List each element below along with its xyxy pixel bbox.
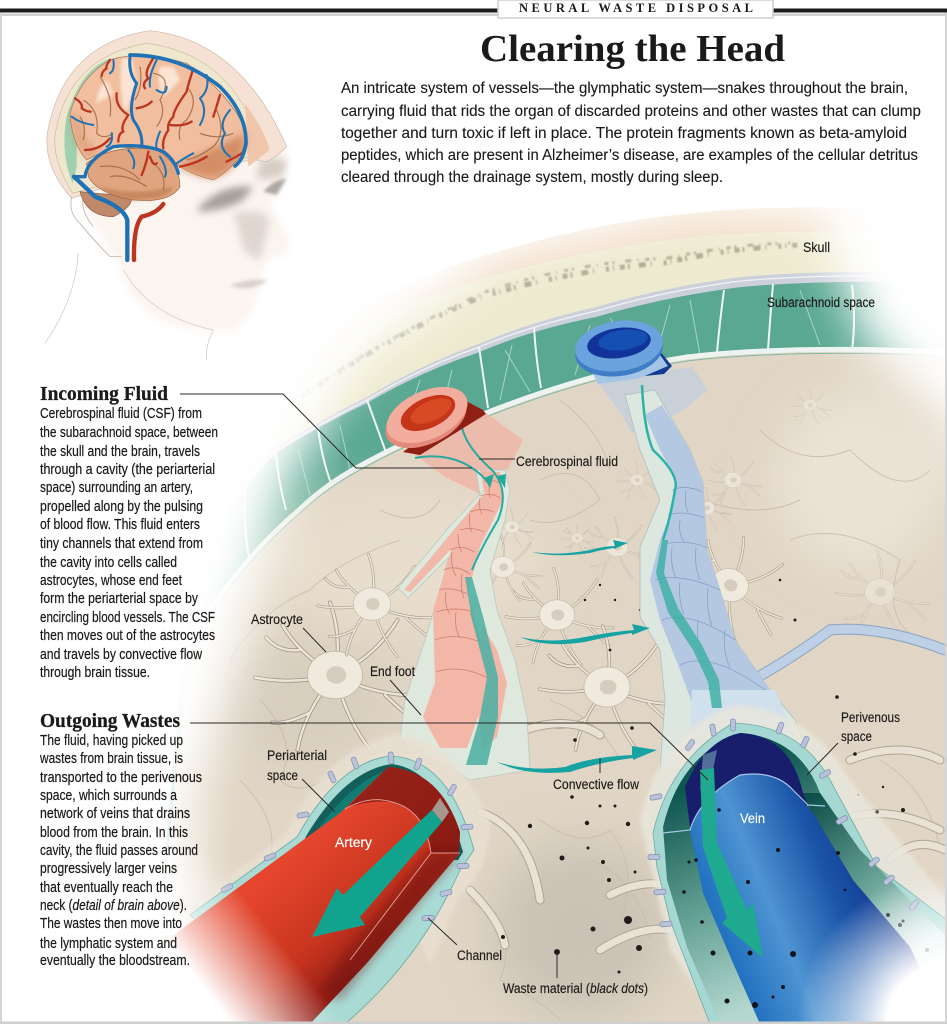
artery cross-section bbox=[150, 735, 490, 1024]
heading: incoming fluid: Incoming Fluid bbox=[40, 383, 168, 405]
text block: outgoing wastes: eventually the bloodstream. bbox=[40, 953, 190, 969]
text block: outgoing wastes: the lymphatic system and bbox=[40, 936, 177, 952]
labels: Artery bbox=[335, 835, 372, 850]
text block: incoming fluid: the cavity into cells called bbox=[40, 555, 177, 571]
ear bbox=[71, 197, 122, 257]
labels: Channel bbox=[457, 948, 502, 963]
tissue network lines bbox=[230, 400, 940, 1020]
text block: outgoing wastes: blood from the brain. In this bbox=[40, 825, 188, 841]
text block: outgoing wastes bbox=[39, 710, 202, 969]
periarterial outer wall bbox=[190, 756, 474, 1024]
astrocytes bbox=[255, 388, 929, 752]
vein cross-section bbox=[640, 705, 947, 1024]
perivenous space left bbox=[663, 733, 947, 1024]
left branch of end feet bbox=[398, 486, 490, 598]
text block: incoming fluid: encircling blood vessels. The CSF bbox=[40, 610, 215, 626]
text block: incoming fluid: and travels by convective flow bbox=[40, 647, 202, 663]
skull layers bbox=[47, 31, 287, 198]
channels on vein bbox=[648, 719, 920, 927]
navy vessel end bbox=[685, 733, 808, 828]
text block: incoming fluid: form the periarterial space by bbox=[40, 591, 199, 607]
heading: outgoing wastes: Outgoing Wastes bbox=[40, 710, 180, 732]
perivenous outer wall bbox=[653, 723, 947, 1024]
text block: incoming fluid: propelled along by the pulsing bbox=[40, 499, 203, 515]
veins bbox=[72, 55, 246, 260]
text block: incoming fluid: through brain tissue. bbox=[40, 665, 150, 681]
intro paragraph: together and turn toxic if left in place. The protein fragments known as beta-amyloid bbox=[341, 125, 907, 142]
teal flow in periarterial space bbox=[465, 577, 498, 765]
main illustration: cross section of brain surface bbox=[164, 208, 945, 1022]
small head and brain figure bbox=[45, 31, 290, 360]
text block: outgoing wastes: space, which surrounds a bbox=[40, 788, 178, 804]
arrow: CSF flow along artery bbox=[312, 810, 442, 937]
sulci bbox=[80, 67, 233, 190]
intro paragraph bbox=[341, 80, 921, 186]
text block: outgoing wastes: cavity, the fluid passes around bbox=[40, 843, 198, 859]
text block: incoming fluid: the subarachnoid space, between bbox=[40, 425, 218, 441]
waste dots bbox=[501, 579, 905, 974]
text block: outgoing wastes: transported to the perivenous bbox=[40, 770, 202, 786]
labels: Skull bbox=[803, 240, 830, 255]
text block: incoming fluid: of blood flow. This fluid enters bbox=[40, 517, 200, 533]
intro paragraph: cleared through the drainage system, mostly during sleep. bbox=[341, 169, 723, 186]
periarterial space bbox=[305, 764, 463, 860]
waste dots in vein bbox=[682, 808, 929, 1008]
temporal lobe bbox=[87, 148, 180, 201]
soft fades at lower corners bbox=[0, 850, 947, 1024]
arteries bbox=[75, 58, 242, 260]
subarachnoid cell dividers bbox=[245, 284, 854, 562]
intro paragraph: An intricate system of vessels—the glymphatic system—snakes throughout the brain, bbox=[341, 80, 908, 97]
text block: incoming fluid: astrocytes, whose end feet bbox=[40, 573, 182, 589]
labels: Vein bbox=[740, 811, 765, 826]
labels bbox=[251, 240, 900, 996]
labels: Waste material (black dots) bbox=[503, 981, 648, 996]
text block: incoming fluid: tiny channels that extend from bbox=[40, 536, 203, 552]
labels: space bbox=[267, 768, 298, 783]
text block: incoming fluid: then moves out of the astrocytes bbox=[40, 628, 215, 644]
convective flow arrows bbox=[497, 540, 657, 773]
text block: incoming fluid: Cerebrospinal fluid (CSF) from bbox=[40, 406, 202, 422]
channels on artery bbox=[221, 752, 473, 921]
labels: Perivenous bbox=[841, 710, 900, 725]
arrow: CSF flow along vein bbox=[700, 768, 763, 958]
labels: Subarachnoid space bbox=[767, 295, 875, 310]
header tab bbox=[498, 0, 773, 18]
artery vessel body bbox=[150, 767, 460, 1024]
text block: outgoing wastes: progressively larger veins bbox=[40, 861, 177, 877]
text block: incoming fluid: space) surrounding an artery, bbox=[40, 480, 193, 496]
intro paragraph: peptides, which are present in Alzheimer’s disease, are examples of the cellular detritus bbox=[341, 147, 918, 164]
cream glial processes bbox=[470, 629, 945, 950]
title: Clearing the Head bbox=[480, 28, 785, 70]
red artery ring bbox=[377, 376, 486, 459]
face bbox=[45, 147, 290, 360]
text block: outgoing wastes: The wastes then move into bbox=[40, 916, 182, 932]
labels: Periarterial bbox=[267, 748, 327, 763]
vein vessel body bbox=[690, 774, 947, 1024]
intro paragraph: carrying fluid that rids the organ of discarded proteins and other wastes that can clump bbox=[341, 103, 921, 120]
labels: End foot bbox=[370, 664, 415, 679]
labels: Astrocyte bbox=[251, 612, 303, 627]
labels: Convective flow bbox=[553, 777, 639, 792]
labels: Cerebrospinal fluid bbox=[516, 454, 618, 469]
text block: outgoing wastes: network of veins that drains bbox=[40, 806, 190, 822]
cerebellum bbox=[80, 192, 132, 217]
brain tissue shading bbox=[490, 840, 670, 1020]
text block: outgoing wastes: The fluid, having picked up bbox=[40, 733, 183, 749]
vein perivenous column bbox=[596, 367, 815, 770]
text block: outgoing wastes: that eventually reach the bbox=[40, 880, 173, 896]
text block: outgoing wastes: wastes from brain tissue, is bbox=[39, 751, 183, 767]
astrocyte end feet scales bbox=[435, 480, 501, 678]
text block: incoming fluid bbox=[40, 383, 218, 681]
labels: space bbox=[841, 729, 872, 744]
text block: incoming fluid: through a cavity (the periarterial bbox=[40, 462, 215, 478]
cerebrum bbox=[70, 56, 247, 180]
skull and meninges layers bbox=[150, 207, 947, 1024]
leader lines bbox=[180, 394, 838, 978]
blue vein ring bbox=[572, 315, 672, 384]
artery periarterial column bbox=[398, 412, 530, 780]
text block: outgoing wastes: neck (detail of brain above). bbox=[40, 898, 187, 914]
text block: incoming fluid: the skull and the brain, travels bbox=[40, 444, 200, 460]
header tab: NEURAL WASTE DISPOSAL bbox=[519, 1, 753, 15]
